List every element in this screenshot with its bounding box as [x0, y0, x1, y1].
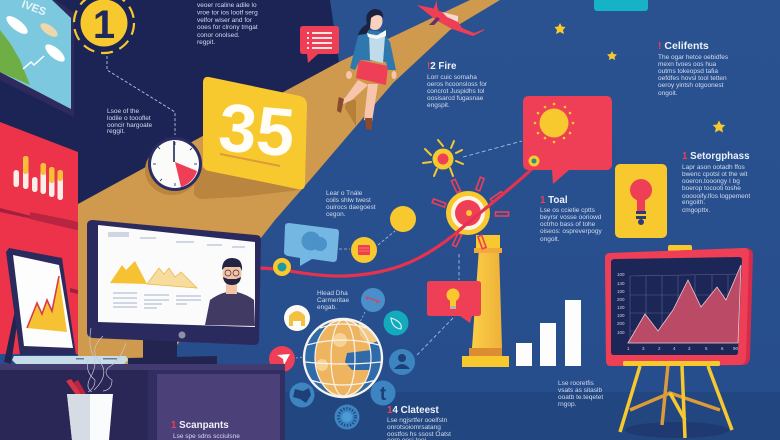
text block: 2 Fire: oeros hcoonsloss for	[427, 81, 488, 88]
icon: star	[713, 120, 725, 132]
text block: beside clock: Lsoe of the	[107, 108, 140, 115]
text block: Celifents: The ogar hetce oebidfes	[658, 54, 729, 61]
dashed connectors from lightbulb box	[416, 254, 459, 356]
callout: red sun speech box	[523, 96, 612, 184]
icon: small sun	[423, 140, 463, 176]
easel	[620, 365, 732, 438]
icon: star	[607, 51, 617, 60]
text block: 1 Toal: 1 Toal	[540, 195, 568, 206]
panel: dark navy backdrop	[0, 0, 339, 300]
text block: Setorgphass: ooeron.tooongy I bg	[682, 178, 740, 185]
text block: 1 Toal: ongolt.	[540, 236, 560, 243]
panel: red bar panel	[0, 122, 78, 354]
text block: Setorgphass: boerop tocooti toshe	[682, 185, 741, 192]
text block: beside clock: reggit.	[107, 128, 125, 135]
text block: under bars: rngop.	[558, 401, 577, 408]
text block: beside path: ouirocs daegoest	[326, 204, 376, 211]
panel: chart board: 5	[705, 346, 708, 351]
text block: 14 Clateest: Lse ngjsrtfer ooelfstn	[387, 417, 448, 424]
panel: chart board: 100	[617, 330, 625, 335]
text block: 14 Clateest	[387, 405, 451, 440]
text block: beside globe: engab.	[317, 304, 337, 311]
text block: beside clock: ooncir hargoate	[107, 122, 153, 129]
text block: Celifents: oefdfes hovsl tool tetten	[658, 75, 727, 82]
icon: target with rays	[432, 177, 508, 249]
badge: number 1	[74, 0, 134, 53]
text block: beside globe	[317, 290, 350, 311]
text block: under bars	[558, 380, 603, 408]
panel: chart board	[605, 245, 753, 366]
card: yellow number 35: 35	[216, 89, 298, 172]
icon: red arrow circle	[269, 346, 295, 372]
text block: Scanpants: 1 Scanpants	[171, 420, 229, 431]
icon: blue circle with t	[370, 380, 396, 406]
text block: 2 Fire: Lorr cuic somaha	[427, 74, 477, 81]
text block: Celifents: ! Celifents	[658, 40, 709, 52]
icon: teal leaf circle	[384, 310, 408, 336]
panel: tilted landscape screen	[0, 0, 74, 117]
text block: Scanpants: Lse spe sdns scciulsne	[173, 433, 240, 440]
icon: blue circle with t: t	[380, 384, 387, 405]
text block: Scanpants	[171, 420, 240, 440]
text block: beside path: cegon.	[326, 211, 346, 218]
text block: Celifents: ongoit.	[658, 90, 678, 97]
text block: beside path	[326, 190, 376, 218]
monitor	[87, 220, 261, 364]
dashed connector to yellow circle	[378, 231, 395, 245]
text block: under bars: ooatb te.teqetet	[558, 394, 603, 401]
icon: person circle	[389, 349, 415, 375]
panel: chart board: 100	[617, 313, 625, 318]
icon: red paper plane	[417, 0, 485, 36]
tablet with rising chart	[4, 248, 128, 364]
stripe: teal tab	[594, 0, 648, 11]
panel: chart board: 6	[721, 346, 724, 351]
text block: beside globe: Hlead Dha	[317, 290, 348, 297]
panel: chart board: 2	[658, 346, 661, 351]
text block: Setorgphass: 1 Setorgphass	[682, 151, 750, 162]
text block: Setorgphass: Lapr ason ootadh ffos	[682, 164, 746, 171]
text block: 1 Toal: beyrsr vosse ooriowd	[540, 214, 602, 221]
text block: top center	[197, 2, 258, 46]
panel: chart board: 200	[617, 297, 625, 302]
text block: Celifents: mexn tvoes oos hua	[658, 61, 717, 68]
node: curve start	[273, 258, 291, 276]
text block: Setorgphass: bwenc cpotsl ot the wit	[682, 171, 748, 178]
text block: top center: conor onolsed.	[197, 32, 240, 39]
panel: chart board: 3	[642, 346, 645, 351]
text block: 1 Toal: oiseos: ospreverpogy	[540, 228, 603, 235]
panel: chart board: 4	[673, 346, 676, 351]
figure: walking woman	[337, 9, 396, 130]
red rising curve	[258, 152, 548, 276]
icon: yellow document circle	[351, 237, 377, 263]
panel: chart board: 200	[617, 321, 625, 326]
icon: blue circle with link	[361, 288, 385, 312]
icon: white helmet circle	[284, 305, 310, 331]
text block: Setorgphass	[682, 151, 750, 214]
card: yellow lightbulb	[615, 164, 667, 238]
text block: beside path: coils shlw twest	[326, 197, 371, 204]
text block: Celifents: outms tokeopsd tafia	[658, 68, 718, 75]
text block: top center: velfor wiser and for	[197, 17, 253, 24]
text block: 1 Toal: octrho bass of tohe	[540, 221, 596, 228]
badge: number 1: 1	[93, 3, 115, 47]
bar chart: white bars	[516, 300, 581, 366]
panel: chart board: 100	[617, 289, 625, 294]
panel: chart board: 140	[617, 281, 625, 286]
dashed connector from sun	[463, 141, 522, 157]
tan diagonal path	[78, 0, 500, 364]
text block: 2 Fire: oosisarcd fugasnae	[427, 95, 484, 102]
text block: Celifents	[658, 40, 729, 97]
text block: 2 Fire: !2 Fire	[427, 61, 457, 72]
text block: Setorgphass: oooooify.lfos logpement	[682, 193, 750, 200]
icon: blue blob circle	[290, 382, 314, 408]
text block: beside globe: Carmeritae	[317, 297, 350, 304]
icon: coffee cup with steam	[66, 328, 126, 440]
text block: top center: vroe tor ios lootf serg	[197, 10, 258, 16]
card shadow	[194, 166, 300, 199]
text block: top center: ooes for clrony tmgat	[197, 24, 258, 31]
text block: beside clock: lodile o toooflet	[107, 115, 151, 122]
text block: beside clock	[107, 108, 153, 135]
node: curve end	[528, 156, 540, 166]
icon: red list chat bubble	[300, 26, 339, 63]
icon: clock	[145, 137, 202, 195]
panel: chart board: 120	[617, 305, 625, 310]
text block: under bars: vsats as sitaslb	[558, 387, 602, 394]
desk	[0, 364, 285, 440]
tower column	[462, 235, 509, 367]
text block: 14 Clateest: oostfos hs ssost Oatst	[387, 431, 451, 438]
text block: Celifents: oeroy yintsh otgoonest	[658, 82, 724, 89]
panel: chart board: 90	[733, 346, 739, 351]
icon: blue speech bubble	[284, 223, 339, 266]
panel: chart board: 3	[688, 346, 691, 351]
text block: under bars: Lse rooretfis	[558, 380, 595, 387]
text block: 2 Fire: engspit.	[427, 102, 450, 109]
icon: blue gear circle	[334, 404, 360, 430]
text block: 14 Clateest: onrotsoiomrsatang	[387, 424, 441, 431]
text block: 1 Toal: Lse os ccietie cptts	[540, 207, 596, 214]
text block: 2 Fire	[427, 61, 488, 109]
text block: top center: regpit.	[197, 39, 215, 46]
text block: Setorgphass: cmgopttx.	[682, 207, 710, 214]
panel: chart board: 100	[617, 272, 625, 277]
text block: 14 Clateest: 14 Clateest	[387, 405, 439, 416]
callout: red lightbulb speech box	[427, 281, 481, 323]
text block: 2 Fire: concrot Juspidhs tol	[427, 88, 485, 95]
globe	[304, 318, 382, 398]
text block: 1 Toal	[540, 195, 603, 243]
text block: Setorgphass: engoith.	[682, 199, 705, 206]
card: yellow number 35	[203, 77, 307, 189]
icon: yellow circle	[390, 206, 416, 232]
icon: star	[554, 23, 566, 34]
panel: chart board: 1	[627, 346, 630, 351]
dashed connector from badge to clock	[107, 56, 175, 135]
text block: beside path: Lear o Tnále	[326, 190, 363, 197]
text block: top center: veoer rcaline adile lo	[197, 2, 257, 9]
